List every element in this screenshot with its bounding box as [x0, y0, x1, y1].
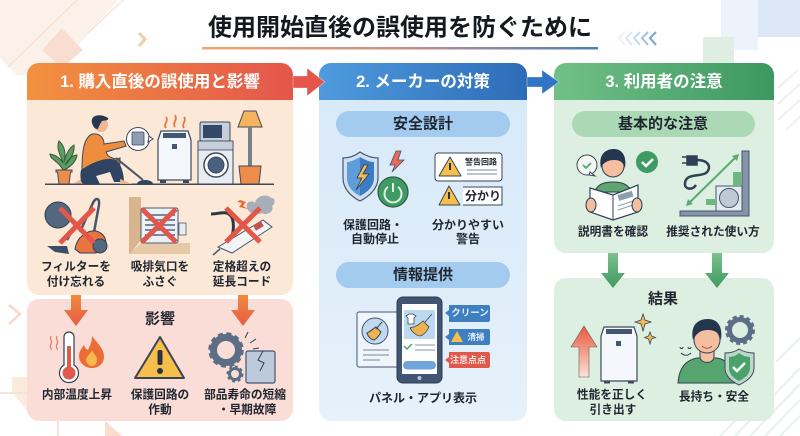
icon: smiling person with gear and shield — [678, 316, 754, 385]
tag: cleaning: 清掃 — [467, 332, 485, 342]
label: vents line 2: ふさぐ — [142, 276, 178, 288]
icon: blocked vent with cross — [129, 197, 190, 254]
label: long life and safety: 長持ち・安全 — [679, 390, 749, 404]
impact heading: 影響 — [145, 310, 175, 328]
label: read manual: 説明書を確認 — [578, 224, 648, 238]
results heading: 結果 — [648, 290, 678, 308]
icon: warning labels — [435, 153, 502, 205]
icon: up arrow and purifier — [571, 314, 656, 384]
panel 3 heading: 3. 利用者の注意 — [605, 72, 723, 91]
pill: safety design — [336, 111, 510, 137]
label: recommended use: 推奨された使い方 — [666, 224, 760, 238]
icon: vacuum cleaner with cross — [45, 199, 107, 254]
arrow: down left — [601, 253, 625, 288]
panel: impact — [27, 295, 293, 421]
panel 1: misuse — [27, 63, 293, 295]
icon: shield with power button — [343, 151, 408, 207]
label: filter line 2: 付け忘れる — [47, 274, 105, 288]
label: shorter life: 部品寿命の短縮 — [204, 388, 286, 402]
pill text: basic notes: 基本的な注意 — [618, 114, 708, 132]
icon: warning labels: 警告回路 — [465, 156, 497, 166]
label: protection circuit: 保護回路・ — [343, 217, 403, 232]
impact background — [27, 299, 293, 421]
icon: warning triangle — [135, 337, 184, 378]
tag: caution — [445, 352, 490, 368]
arrow: down right — [231, 295, 255, 326]
illustration: person and appliances — [45, 111, 274, 185]
panel 3 header — [554, 63, 774, 100]
results background — [554, 278, 774, 421]
label: correct performance: 性能を正しく — [577, 388, 647, 402]
arrow: down left — [64, 295, 88, 326]
panel 1 header — [27, 63, 293, 100]
label: extension cord line 2: 延長コード — [213, 274, 271, 288]
panel 2 header — [319, 63, 527, 100]
tag: clean — [445, 305, 490, 322]
pill: basic notes — [572, 111, 755, 137]
panel 1 body — [27, 100, 293, 295]
icon: plug and clearance — [680, 151, 749, 216]
icon: overloaded power strip — [211, 196, 275, 255]
panel 3: user — [554, 63, 774, 253]
label: bring out: 引き出す — [590, 404, 636, 416]
arrow: panel 1 to panel 2 — [293, 68, 325, 96]
label: temperature: 内部温度上昇 — [42, 388, 112, 402]
panel 1 heading: 1. 購入直後の誤使用と影響 — [60, 71, 260, 91]
panel 2: manufacturer — [319, 63, 527, 421]
panel 2 heading: 2. メーカーの対策 — [356, 71, 490, 91]
label: warnings: 警告 — [456, 231, 480, 246]
label: panel and app display: パネル・アプリ表示 — [369, 390, 477, 405]
panel 3 body — [554, 100, 774, 253]
icon: warning labels: 分かり — [465, 189, 501, 203]
label: extension cord: 定格超えの — [213, 260, 271, 274]
arrow: down right — [705, 253, 729, 288]
label: clear warnings: 分かりやすい — [432, 218, 504, 232]
tag: cleaning — [445, 329, 490, 345]
icon: smartphone — [397, 297, 442, 383]
pill: information — [336, 262, 510, 288]
arrow: panel 2 to panel 3 — [527, 70, 559, 94]
pill text: information: 情報提供 — [393, 266, 453, 284]
panel: results — [554, 253, 774, 421]
panel 2 body — [319, 100, 527, 421]
label: vents: 吸排気口を — [131, 260, 189, 274]
icon: gears and broken part — [210, 332, 275, 383]
label: filter: フィルターを — [41, 260, 111, 274]
icon: manual page — [357, 312, 397, 367]
icon: person reading manual — [577, 149, 658, 220]
title: 使用開始直後の誤使用を防ぐために — [208, 14, 592, 42]
label: protection circuit: 保護回路の — [131, 388, 189, 402]
tag: clean: クリーン — [451, 308, 489, 319]
tag: caution: 注意点点 — [450, 354, 486, 365]
title underline — [202, 47, 598, 50]
icon: thermometer and flame — [50, 332, 104, 383]
label: auto stop: 自動停止 — [351, 231, 399, 246]
label: protection circuit line 2: 作動 — [148, 402, 172, 416]
label: shorter life line 2: ・早期故障 — [218, 402, 277, 416]
pill text: safety design: 安全設計 — [393, 114, 453, 132]
